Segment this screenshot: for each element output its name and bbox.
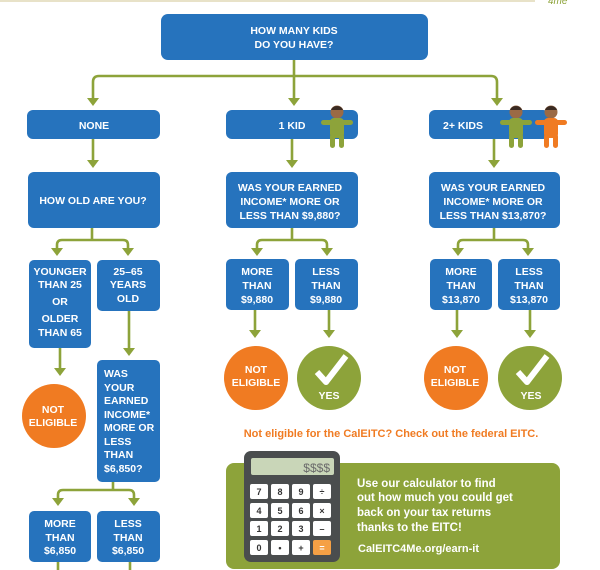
icon: calculator: 6 <box>298 506 304 516</box>
box: younger <box>29 260 91 348</box>
top rule <box>0 0 535 2</box>
promo text: back on your tax returns <box>357 507 491 519</box>
box: 2+ kids: 2+ KIDS <box>443 120 483 132</box>
box: more 13870 <box>430 259 492 310</box>
box: less 13870: LESS <box>515 266 543 278</box>
promo text: CalEITC4Me.org/earn-it <box>358 543 479 555</box>
box: was your income 6850: $6,850? <box>104 463 143 475</box>
box: younger: OLDER <box>42 313 79 325</box>
circle: not eligible 1 kid: ELIGIBLE <box>232 377 280 389</box>
title box: HOW MANY KIDS <box>250 25 338 37</box>
box: less 6850: LESS <box>114 518 142 530</box>
circle: yes 1 kid <box>297 346 361 410</box>
icon: calculator: ÷ <box>320 487 325 497</box>
box: more 9880 <box>226 259 289 310</box>
box: was your income 6850: YOUR <box>104 382 135 394</box>
box: less 13870 <box>498 259 560 310</box>
box: none <box>27 110 160 139</box>
box: more 13870: MORE <box>445 266 477 278</box>
icon: calculator: 9 <box>298 487 304 497</box>
panel: calculator promo <box>226 451 560 569</box>
circle: yes 2+: YES <box>520 390 542 402</box>
box: less 9880: $9,880 <box>310 294 342 306</box>
box: was your income 6850: INCOME* <box>104 409 151 421</box>
icon: calculator: 8 <box>277 487 283 497</box>
icon: calculator: 2 <box>277 524 283 534</box>
box: was your income 6850: MORE OR <box>104 422 155 434</box>
circle: not eligible none: ELIGIBLE <box>29 417 77 429</box>
connectors <box>51 60 536 570</box>
box: 1 kid <box>226 110 358 139</box>
box: how old <box>28 172 160 228</box>
icon: calculator: 5 <box>277 506 283 516</box>
circle: not eligible 2+: NOT <box>444 364 467 376</box>
promo text <box>357 478 513 555</box>
box: less 9880: LESS <box>312 266 340 278</box>
box: more 13870: THAN <box>446 280 476 292</box>
icon: calculator: 0 <box>256 543 262 553</box>
box: more 6850 <box>29 511 91 562</box>
promo text: out how much you could get <box>357 492 513 504</box>
box: was your income 6850: WAS <box>104 368 128 380</box>
circle: not eligible none <box>22 384 86 448</box>
box: 25-65 <box>97 260 160 311</box>
box: more 6850: $6,850 <box>44 545 76 557</box>
note text: Not eligible for the CalEITC? Check out the federal EITC. <box>244 428 538 440</box>
box: was your income 6850: EARNED <box>104 395 149 407</box>
box: less 6850 <box>97 511 160 562</box>
box: 25-65: OLD <box>117 293 139 305</box>
box: younger: OR <box>52 296 68 308</box>
icon: kid <box>321 106 353 148</box>
circle: not eligible 1 kid <box>224 346 288 410</box>
box: less 13870: THAN <box>514 280 544 292</box>
icon: calculator: $$$$ <box>303 461 330 475</box>
box: less 9880 <box>295 259 358 310</box>
icon: calculator: 4 <box>256 506 262 516</box>
box: was your income 6850: THAN <box>104 449 133 461</box>
circle: not eligible 2+ <box>424 346 488 410</box>
icon: calculator: • <box>278 543 282 553</box>
icon: calculator: 1 <box>256 524 262 534</box>
box: was your income 6850: LESS <box>104 436 131 448</box>
icon: calculator: × <box>319 506 325 516</box>
box: younger: THAN 25 <box>38 279 82 291</box>
icon: calculator: 3 <box>298 524 304 534</box>
box: 1 kid: 1 KID <box>279 120 306 132</box>
box: 1 kid income: INCOME* MORE OR <box>240 196 340 208</box>
icon: calculator <box>244 451 340 562</box>
icon: calculator: – <box>319 524 325 534</box>
box: 1 kid income: LESS THAN $9,880? <box>240 210 340 222</box>
box: 2+ income <box>429 172 560 228</box>
box: 25-65: YEARS <box>110 279 146 291</box>
box: none: NONE <box>79 120 109 132</box>
circle: not eligible 1 kid: NOT <box>245 364 268 376</box>
box: more 13870: $13,870 <box>442 294 480 306</box>
box: more 9880: THAN <box>242 280 272 292</box>
circle: not eligible 2+: ELIGIBLE <box>431 377 479 389</box>
box: less 9880: THAN <box>311 280 341 292</box>
promo text: thanks to the EITC! <box>357 522 462 534</box>
box: less 13870: $13,870 <box>510 294 548 306</box>
box: less 6850: THAN <box>113 532 143 544</box>
box: 2+ income: WAS YOUR EARNED <box>441 182 546 194</box>
box: 1 kid income: WAS YOUR EARNED <box>238 182 343 194</box>
icon: two kids <box>500 106 567 148</box>
box: younger: THAN 65 <box>38 327 82 339</box>
box: how old: HOW OLD ARE YOU? <box>39 195 147 207</box>
box: younger: YOUNGER <box>33 266 87 278</box>
box: more 9880: $9,880 <box>241 294 273 306</box>
promo text: Use our calculator to find <box>357 478 496 490</box>
box: less 6850: $6,850 <box>112 545 144 557</box>
circle: not eligible none: NOT <box>42 404 65 416</box>
box: 2+ income: LESS THAN $13,870? <box>440 210 546 222</box>
box: more 9880: MORE <box>241 266 273 278</box>
title box: DO YOU HAVE? <box>255 39 333 51</box>
icon: calculator: 7 <box>256 487 262 497</box>
box: more 6850: THAN <box>45 532 75 544</box>
icon: calculator: = <box>319 543 325 553</box>
box: 2+ kids <box>429 110 549 139</box>
box: was your income 6850 <box>97 360 160 482</box>
circle: yes 1 kid: YES <box>318 390 340 402</box>
title box <box>161 14 428 60</box>
box: 1 kid income <box>226 172 358 228</box>
circle: yes 2+ <box>498 346 562 410</box>
box: 2+ income: INCOME* MORE OR <box>443 196 543 208</box>
box: 25-65: 25–65 <box>113 266 143 278</box>
box: more 6850: MORE <box>44 518 76 530</box>
icon: calculator: + <box>298 543 304 553</box>
